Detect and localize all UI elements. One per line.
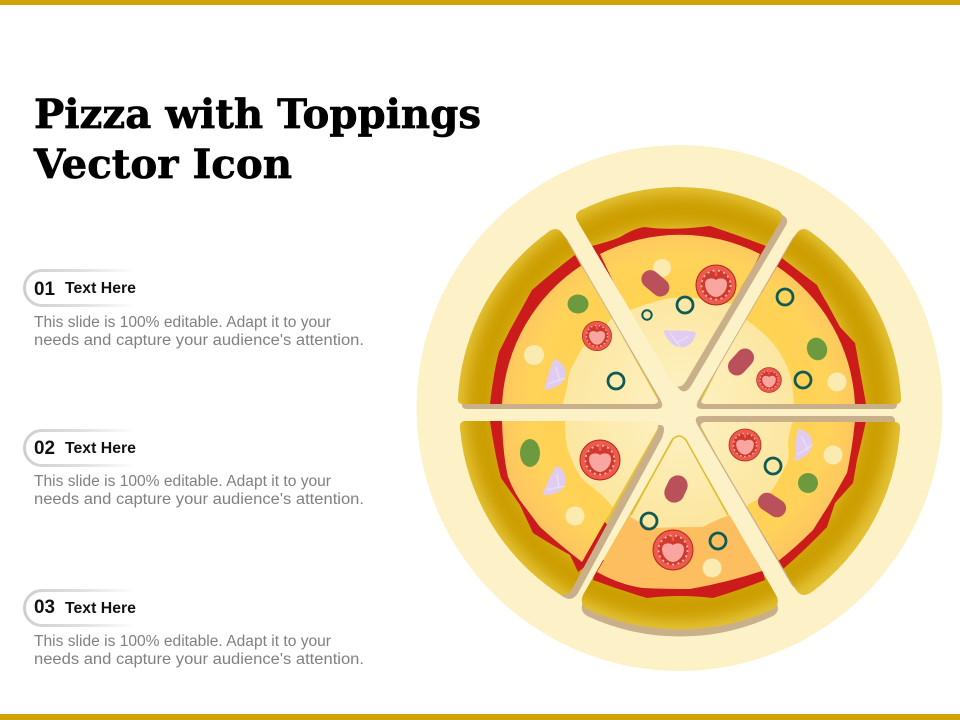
pill outline 01 [25, 270, 135, 306]
body text 02: This slide is 100% editable. Adapt it to your [34, 473, 331, 490]
sausage [638, 266, 673, 300]
plate circle [416, 145, 942, 671]
body text 01: needs and capture your audience's attention. [34, 332, 364, 349]
tomato [582, 321, 612, 351]
tomato [729, 429, 761, 461]
tomato [653, 530, 693, 570]
title: Vector Icon [33, 141, 292, 188]
title: Pizza with Toppings [34, 91, 481, 138]
heading 02: Text Here [65, 440, 136, 457]
heading 01: Text Here [65, 280, 136, 297]
pizza illustration [416, 145, 942, 671]
ring [710, 533, 726, 549]
slice: bottom left [460, 421, 664, 599]
ring [608, 373, 624, 389]
number 03: 03 [34, 597, 55, 618]
ring [641, 513, 657, 529]
small ring [642, 310, 652, 320]
onion [789, 428, 815, 460]
green olive [804, 335, 830, 363]
body text 02: needs and capture your audience's attention. [34, 491, 364, 508]
slice: top [576, 187, 788, 392]
slice: bottom right [696, 416, 900, 595]
item 02 [25, 430, 364, 508]
pale cheese dot [566, 506, 584, 526]
pale cheese dot [824, 446, 842, 464]
pale cheese dot [828, 372, 846, 392]
number 02: 02 [34, 438, 55, 459]
green olive [798, 473, 818, 493]
slice: bottom [582, 435, 778, 636]
tomato [580, 440, 620, 480]
number 01: 01 [34, 279, 55, 300]
ring [765, 458, 781, 474]
item 01 [25, 270, 364, 349]
ring [795, 372, 811, 388]
sausage [661, 472, 691, 506]
body text 03 [34, 633, 364, 668]
tomato [757, 368, 781, 392]
body text 02 [34, 473, 364, 508]
bottom accent bar [0, 714, 960, 720]
pale cheese dot [653, 259, 671, 277]
onion [543, 465, 567, 497]
heading 03: Text Here [65, 600, 136, 617]
ring [677, 297, 693, 313]
ring [777, 289, 793, 305]
tomato [696, 265, 736, 305]
slice: top left [458, 229, 662, 409]
top accent bar [0, 0, 960, 5]
body text 01 [34, 314, 364, 349]
title [33, 91, 481, 188]
green olive [568, 294, 588, 314]
onion [664, 324, 698, 350]
pill outline 02 [25, 430, 135, 466]
onion [545, 360, 565, 389]
slice: top right [696, 229, 902, 409]
green olive [520, 439, 540, 467]
pill outline 03 [25, 590, 135, 626]
sausage [724, 345, 758, 379]
pale cheese dot [524, 345, 544, 365]
gold tip outline [631, 436, 728, 515]
pale cheese dot [702, 558, 722, 578]
body text 03: needs and capture your audience's attention. [34, 651, 364, 668]
item 03 [25, 590, 364, 668]
body text 01: This slide is 100% editable. Adapt it to your [34, 314, 331, 331]
body text 03: This slide is 100% editable. Adapt it to your [34, 633, 331, 650]
sausage [755, 489, 789, 521]
